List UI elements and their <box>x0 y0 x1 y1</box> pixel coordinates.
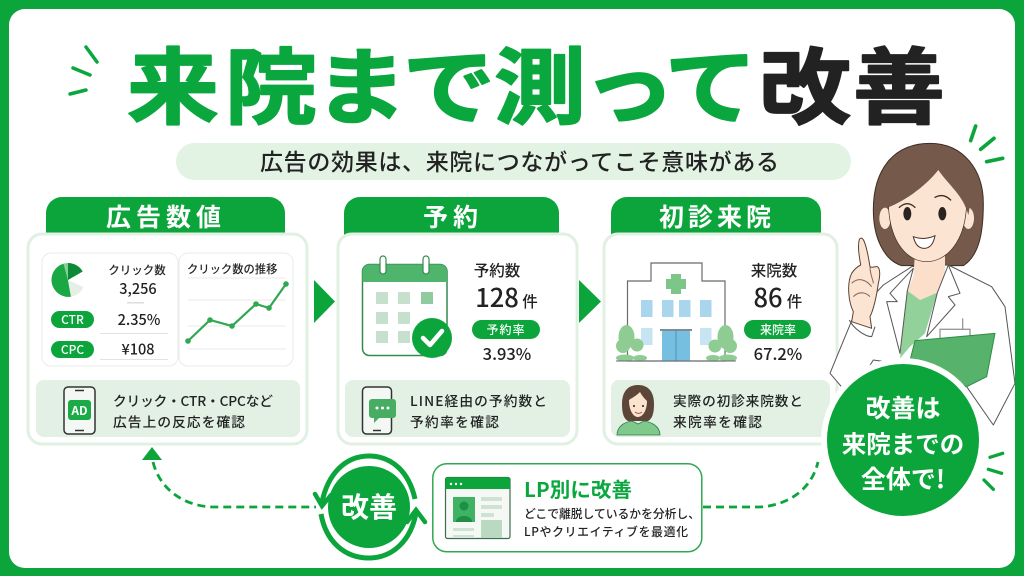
icon: sparks top right <box>971 126 1003 162</box>
pocket and pen <box>940 318 970 346</box>
metric: 予約数: 128 <box>475 278 519 315</box>
note: 初診来院数: 実際の初診来院数と <box>673 390 803 410</box>
callout bubble: 改善は <box>865 389 941 425</box>
panel: LP別に改善: LP別に改善 <box>524 473 632 503</box>
hair back <box>873 143 983 266</box>
pie chart <box>51 263 83 297</box>
metrics table <box>42 253 178 366</box>
panel: 広告数値 <box>28 197 307 444</box>
note: 広告上の反応: 広告上の反応を確認 <box>113 411 245 431</box>
CTR row: 2.35% <box>118 309 161 330</box>
neck <box>907 253 945 300</box>
card heading: 予約: 予約 <box>423 198 483 234</box>
title: 来院まで測って <box>127 21 757 142</box>
CTR row: CTR <box>61 311 84 328</box>
callout bubble: 来院までの <box>842 426 964 461</box>
card heading: 広告数値: 広告数値 <box>106 198 226 234</box>
mouth <box>913 236 935 248</box>
note: 広告上の反応 <box>36 380 300 437</box>
CPC row: ¥108 <box>121 338 155 360</box>
note: LINE経由 <box>345 380 570 437</box>
finger lines <box>852 267 873 297</box>
icon: phone AD: AD <box>70 402 88 419</box>
note: 初診来院数 <box>611 380 830 437</box>
CPC row: CPC <box>61 341 84 358</box>
coat <box>830 265 1015 425</box>
CPC row <box>51 338 168 360</box>
note: 初診来院数: 来院率を確認 <box>673 411 762 431</box>
arrow: dashed loop to 広告数値 <box>142 447 316 507</box>
note: LINE経由: LINE経由の予約数と <box>410 390 547 410</box>
icon: improvement cycle: 改善 <box>341 486 397 526</box>
ears <box>879 208 891 229</box>
illustration: doctor <box>830 143 1015 425</box>
card heading: 広告数値 <box>46 197 285 236</box>
panel: 初診来院 <box>604 197 837 444</box>
metric: 来院数: 件 <box>787 290 802 312</box>
icon: calendar <box>362 256 452 358</box>
icon: phone chat <box>362 387 396 434</box>
scrub top <box>900 291 937 358</box>
callout bubble: 全体で! <box>861 460 945 496</box>
metric: 来院率: 67.2% <box>754 341 802 365</box>
icon: browser page <box>446 478 510 538</box>
hand <box>849 238 880 328</box>
clipboard <box>910 333 995 387</box>
card heading: 初診来院 <box>611 197 821 236</box>
panel: LP別に改善: どこで離脱しているかを分析し、 <box>524 505 700 522</box>
metric: 来院数: 86 <box>753 278 783 315</box>
arrow: to 初診来院 <box>579 280 601 323</box>
sleeve cuff <box>849 320 875 337</box>
metric: 予約率: 予約率 <box>486 321 526 338</box>
metric: 来院率 <box>744 320 811 365</box>
metrics table: 3,256 <box>119 278 157 299</box>
brows <box>899 196 951 207</box>
face <box>888 163 967 262</box>
metric: 来院率: 来院率 <box>760 321 796 338</box>
line chart <box>179 253 293 366</box>
metric: 予約数 <box>474 259 538 315</box>
note: 広告上の反応: クリック・CTR・CPCなど <box>113 390 273 410</box>
arrow: to 予約 <box>314 280 335 323</box>
metric: 予約数: 予約数 <box>474 259 521 281</box>
icon: staff person <box>617 385 660 435</box>
eyes <box>903 207 911 220</box>
metric: 予約率: 3.93% <box>483 341 531 365</box>
callout bubble <box>824 361 982 519</box>
metric: 来院数 <box>751 259 802 315</box>
metric: 予約数: 件 <box>522 290 538 312</box>
icon: sparks bottom right <box>984 453 1003 489</box>
subtitle banner: 広告の効果は、来院につながってこそ意味がある <box>260 143 779 177</box>
line chart: クリック数の推移 <box>187 261 277 277</box>
card heading: 予約 <box>344 197 559 236</box>
bangs <box>888 150 970 215</box>
CTR row <box>51 309 168 334</box>
icon: title sparks <box>70 47 97 94</box>
arrow: dashed line from LP box to bubble <box>703 462 818 507</box>
panel: 予約 <box>338 197 577 444</box>
panel: LP別に改善 <box>433 464 702 552</box>
metrics table: クリック数 <box>108 262 166 278</box>
panel: LP別に改善: LPやクリエイティブを最適化 <box>524 523 688 540</box>
title: 改善 <box>759 21 945 142</box>
icon: improvement cycle <box>315 456 425 558</box>
card heading: 初診来院: 初診来院 <box>659 198 775 234</box>
metric: 来院数: 来院数 <box>751 259 798 281</box>
metric: 予約率 <box>472 320 540 365</box>
icon: hospital <box>616 263 737 362</box>
note: LINE経由: 予約率を確認 <box>410 411 499 431</box>
icon: phone AD <box>64 387 95 434</box>
lapels <box>887 265 960 353</box>
